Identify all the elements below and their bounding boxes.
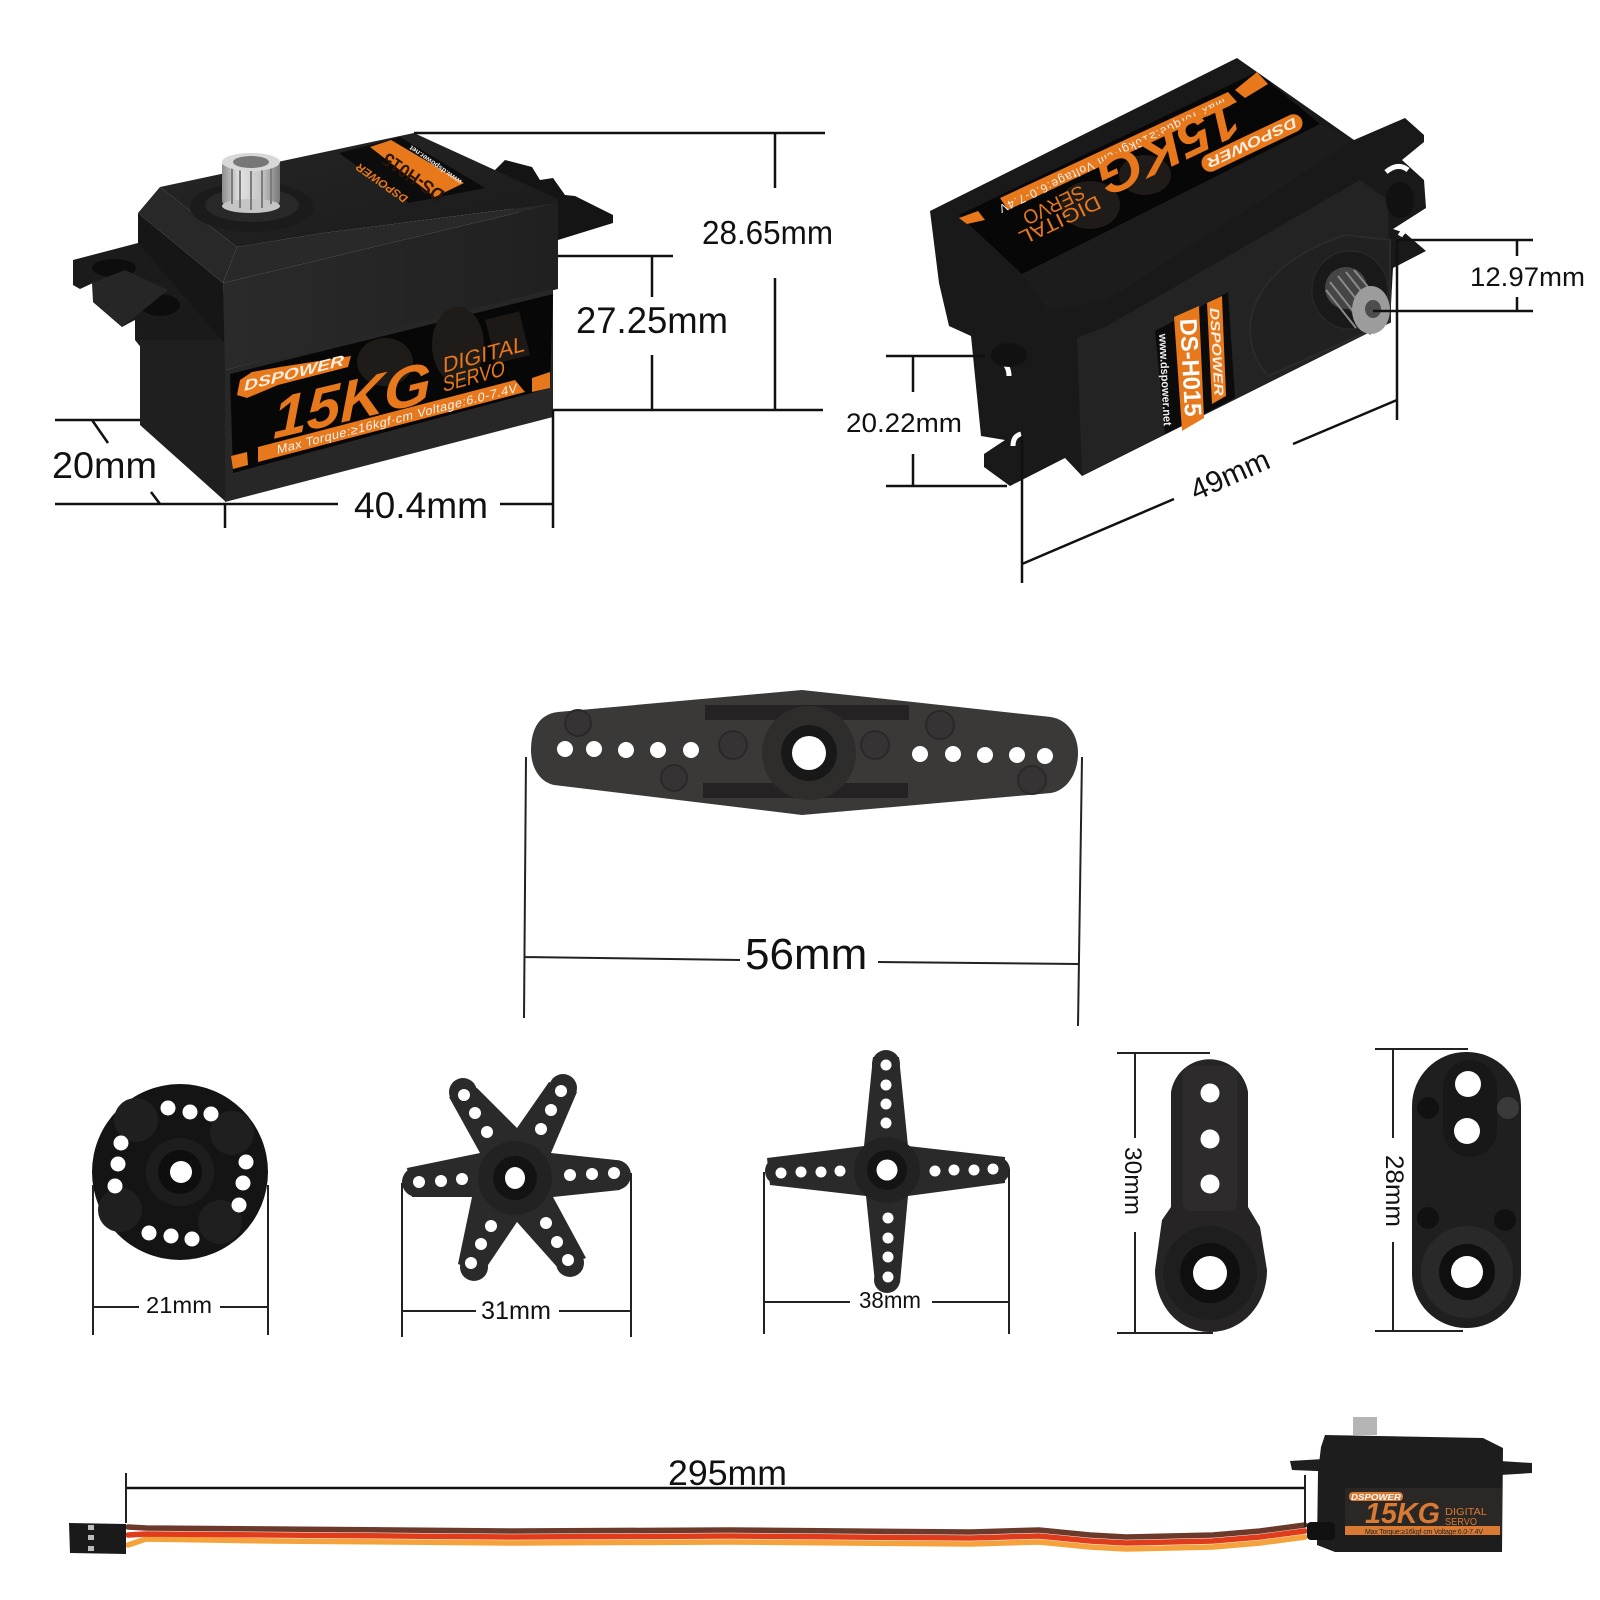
dimension: 20mm: 20mm bbox=[52, 445, 157, 486]
front label: 15KG digital servo: SERVO bbox=[443, 356, 505, 397]
front label: 15KG digital servo bbox=[230, 294, 553, 473]
icon: output shaft knob bbox=[222, 153, 280, 213]
dimension: 12.97mm bbox=[1373, 240, 1585, 311]
small servo: SERVO bbox=[1445, 1517, 1477, 1528]
dimension: 40.4mm: 40.4mm bbox=[354, 485, 488, 526]
dimension: 12.97mm: 12.97mm bbox=[1470, 262, 1585, 292]
dimension: 20.22mm: 20.22mm bbox=[846, 408, 962, 438]
dimension: 28mm bbox=[1375, 1049, 1468, 1331]
front label: 15KG digital servo: 15KG bbox=[273, 350, 431, 452]
dimension: 20mm bbox=[52, 420, 338, 504]
dimension: 21mm: 21mm bbox=[146, 1292, 212, 1318]
dimension: 295mm: 295mm bbox=[668, 1454, 787, 1493]
dimension: 49mm: 49mm bbox=[1185, 443, 1275, 507]
top sticker: DS-H015 bbox=[379, 148, 449, 205]
dimension: 31mm: 31mm bbox=[481, 1297, 551, 1325]
dimension: 21mm bbox=[93, 1185, 268, 1335]
top sticker bbox=[339, 137, 485, 205]
panel: right servo with dimensions bbox=[846, 58, 1585, 583]
panel: left servo with dimensions bbox=[52, 133, 833, 528]
dimension: 28mm: 28mm bbox=[1380, 1155, 1408, 1227]
servo body, angled view bbox=[930, 58, 1426, 486]
top sticker: DSPOWER bbox=[354, 160, 410, 205]
small servo bbox=[1290, 1417, 1532, 1552]
icon: three-wire cable bbox=[128, 1525, 1305, 1549]
dimension: 30mm bbox=[1117, 1053, 1213, 1333]
front sticker: DS-H015: www.dspower.net bbox=[1156, 333, 1173, 426]
logo: DSPOWER bbox=[1198, 111, 1306, 175]
dimension: 20.22mm bbox=[846, 356, 1007, 486]
servo body, front view bbox=[73, 133, 613, 502]
small servo: DSPOWER bbox=[1351, 1493, 1401, 1502]
icon: oval arm bbox=[1412, 1052, 1521, 1328]
dimension: 28.65mm bbox=[414, 133, 833, 410]
dimension: 27.25mm bbox=[558, 256, 728, 410]
dimension: 40.4mm bbox=[225, 410, 553, 528]
panel: six-point star horn 31mm bbox=[402, 1074, 631, 1337]
dimension: 38mm: 38mm bbox=[859, 1287, 921, 1313]
icon: round disc bbox=[92, 1084, 268, 1260]
icon: long arm bbox=[531, 690, 1078, 815]
dimension: 28.65mm: 28.65mm bbox=[702, 214, 833, 251]
icon: six-arm star bbox=[402, 1074, 631, 1281]
dimension: 31mm bbox=[402, 1173, 631, 1337]
dimension: 56mm bbox=[524, 757, 1082, 1026]
icon: three-pin connector bbox=[69, 1523, 126, 1554]
small servo: DIGITAL bbox=[1445, 1507, 1487, 1518]
panel: single arm 30mm bbox=[1117, 1053, 1267, 1333]
panel: long double servo arm 56mm bbox=[524, 690, 1082, 1026]
front label: 15KG digital servo: Max Torque:≥16kgf·cm Voltage:6.0-7.4V bbox=[277, 381, 518, 457]
front label: 15KG digital servo: DSPOWER bbox=[244, 352, 344, 395]
dimension: 56mm: 56mm bbox=[745, 930, 867, 979]
dimension: 30mm: 30mm bbox=[1119, 1147, 1146, 1215]
front label: 15KG digital servo: DIGITAL bbox=[443, 331, 525, 378]
side label: 15KG, upside down: 15KG bbox=[1087, 88, 1251, 207]
panel: servo with cable 295mm bbox=[69, 1417, 1532, 1554]
panel: round disc horn 21mm bbox=[92, 1084, 268, 1335]
panel: cross horn 38mm bbox=[764, 1050, 1010, 1334]
dimension: 38mm bbox=[764, 1169, 1009, 1334]
side label: 15KG, upside down: DIGITAL bbox=[1015, 191, 1104, 248]
side label: 15KG, upside down: DSPOWER bbox=[1203, 115, 1300, 172]
small servo: 15KG bbox=[1365, 1498, 1440, 1530]
icon: four-arm cross bbox=[765, 1050, 1010, 1293]
side label: 15KG, upside down bbox=[959, 72, 1320, 274]
dimension: 49mm bbox=[1022, 240, 1397, 583]
dimension: 27.25mm: 27.25mm bbox=[576, 300, 728, 341]
icon: short arm bbox=[1155, 1059, 1267, 1332]
side label: 15KG, upside down: Max Torque:≥16kgf·cm Voltage:6.0-7.4V bbox=[997, 95, 1229, 216]
small servo: Max Torque:≥16kgf·cm Voltage:6.0-7.4V bbox=[1365, 1529, 1483, 1536]
front sticker: DS-H015: DSPOWER bbox=[1207, 307, 1227, 397]
dimension: 295mm bbox=[126, 1454, 1305, 1527]
front sticker: DS-H015 bbox=[1155, 292, 1235, 434]
top sticker: www.dspower.net bbox=[408, 143, 464, 185]
panel: oval arm 28mm bbox=[1375, 1049, 1521, 1331]
icon: output shaft knob, angled bbox=[1312, 251, 1390, 335]
side label: 15KG, upside down: SERVO bbox=[1019, 180, 1088, 229]
front sticker: DS-H015: DS-H015 bbox=[1174, 318, 1206, 417]
